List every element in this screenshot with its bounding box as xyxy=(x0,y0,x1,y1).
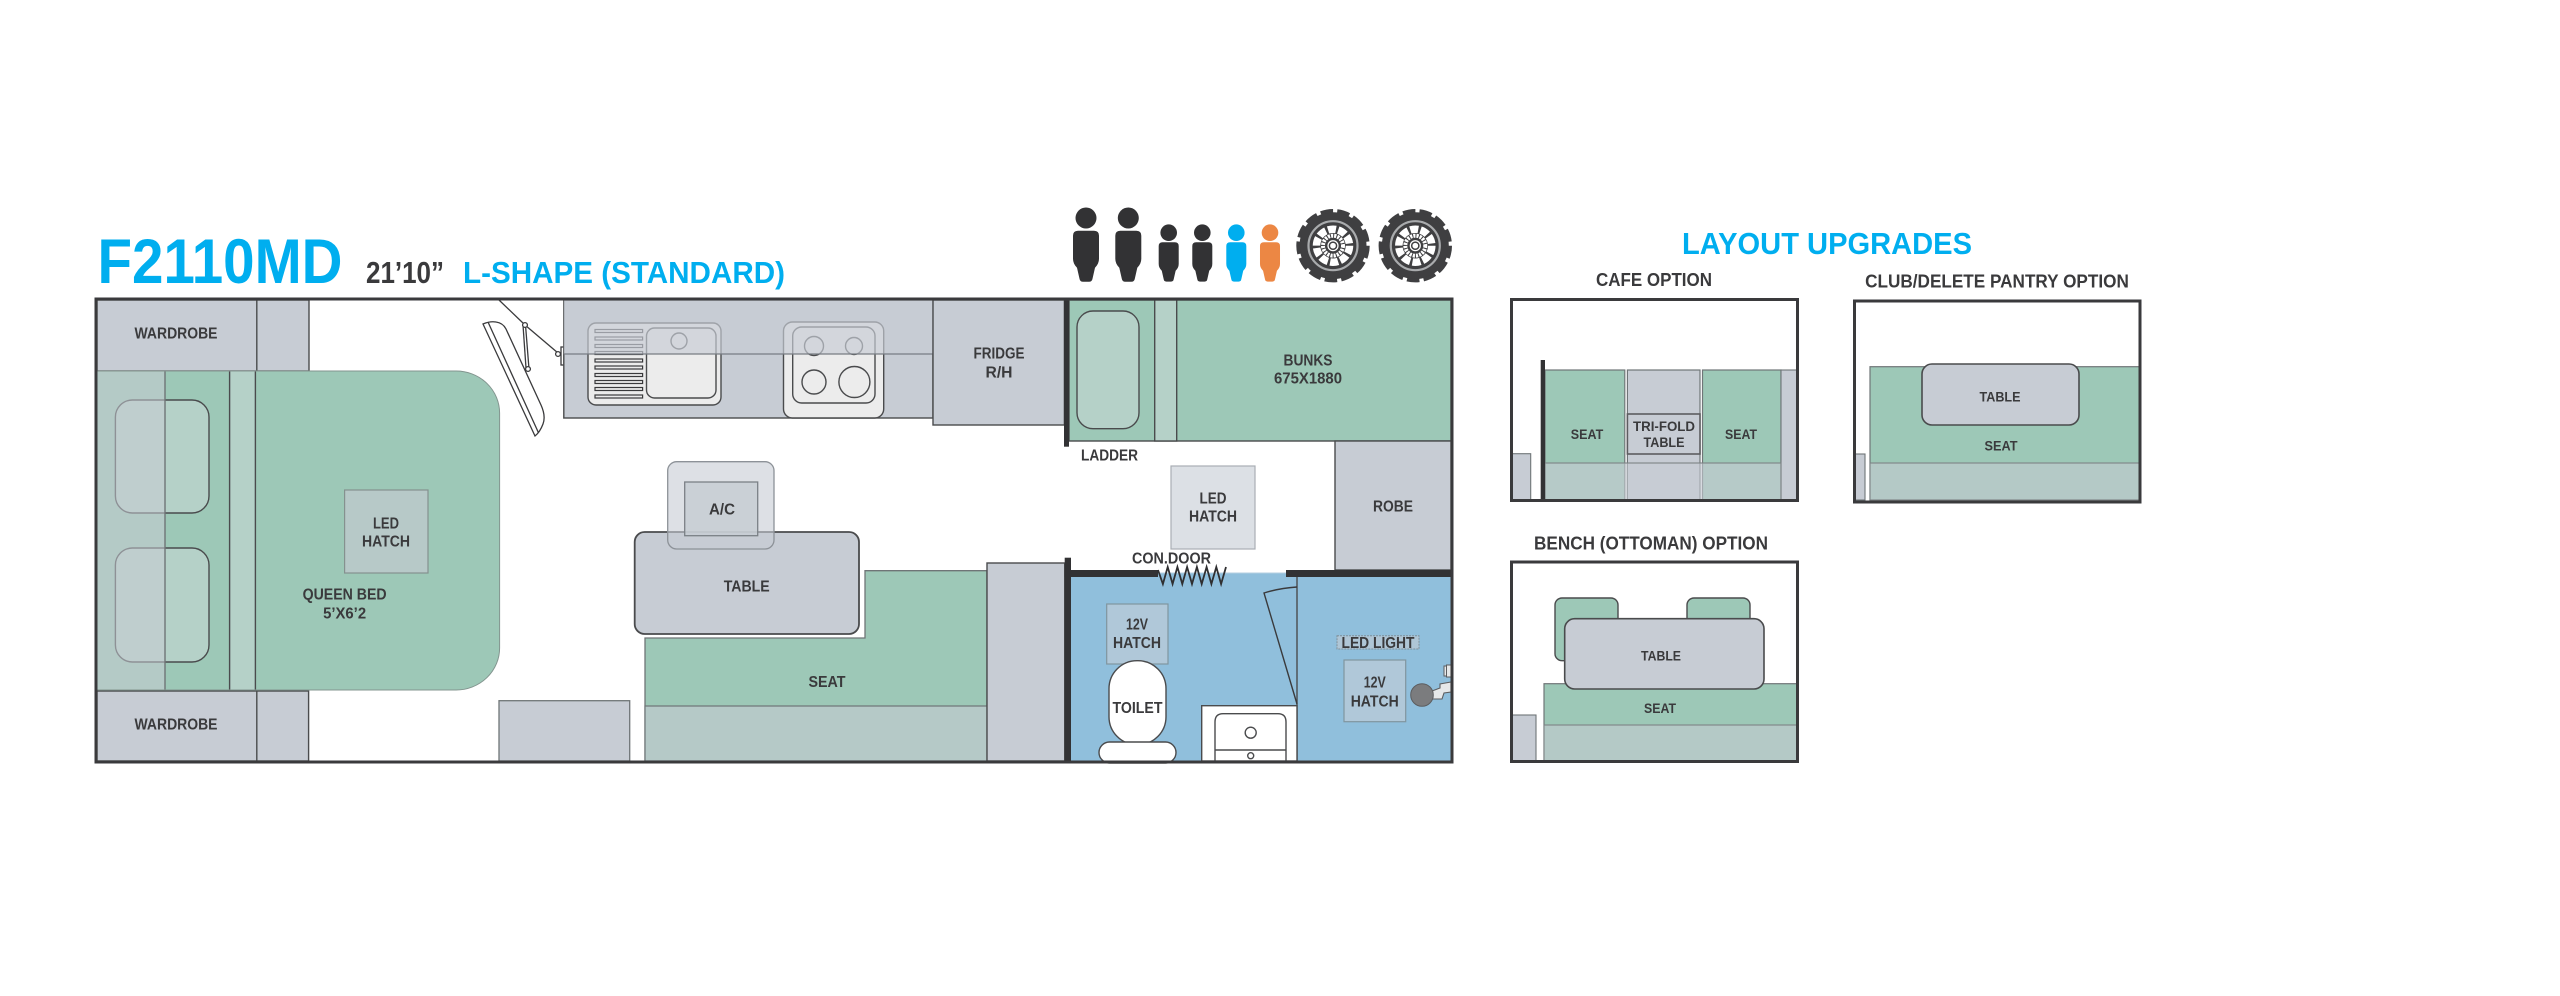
side cabinet xyxy=(1512,715,1536,761)
panel: bathroom xyxy=(1070,573,1451,763)
LED hatch hallway: HATCH xyxy=(1189,508,1237,526)
seat left xyxy=(1545,370,1625,500)
wardrobe bottom: WARDROBE xyxy=(134,716,218,734)
outer wall xyxy=(96,299,1452,762)
ottoman left xyxy=(1555,598,1618,661)
seat xyxy=(1870,367,2140,501)
concertina door xyxy=(1132,550,1226,584)
vanity basin xyxy=(1202,706,1297,761)
LED hatch over bed: HATCH xyxy=(362,534,410,550)
partition walls xyxy=(1064,300,1453,762)
LED hatch over bed xyxy=(345,490,428,573)
sink xyxy=(588,323,721,405)
wardrobe top xyxy=(97,300,309,371)
ottoman right xyxy=(1687,598,1750,648)
table xyxy=(635,532,859,634)
icon: tyre 1 xyxy=(1298,211,1368,280)
toilet: TOILET xyxy=(1112,700,1163,717)
subtitle: layout name: L-SHAPE (STANDARD) xyxy=(463,255,785,290)
icon: adult 1 xyxy=(1073,208,1099,282)
heading: bench option: BENCH (OTTOMAN) OPTION xyxy=(1534,534,1768,554)
box outline xyxy=(1512,562,1798,762)
queen bed xyxy=(97,371,500,690)
seat right xyxy=(1702,370,1781,500)
entry door xyxy=(483,300,564,436)
panel: main floor plan xyxy=(96,299,1453,763)
heading: club option: CLUB/DELETE PANTRY OPTION xyxy=(1865,272,2129,292)
tri-fold table: TRI-FOLD xyxy=(1633,418,1695,434)
12V hatch shower xyxy=(1344,660,1406,722)
ladder label: LADDER xyxy=(1081,448,1138,464)
seat right: SEAT xyxy=(1725,426,1757,442)
fridge: R/H xyxy=(986,364,1012,382)
cabinet beside door xyxy=(499,701,630,761)
bunks: 675X1880 xyxy=(1274,370,1342,388)
LED hatch over bed: LED xyxy=(373,516,399,532)
table: TABLE xyxy=(1980,389,2020,405)
icons: occupancy people xyxy=(1073,208,1280,282)
tri-fold table xyxy=(1627,370,1700,500)
12V hatch shower: HATCH xyxy=(1351,694,1399,710)
bench seat: SEAT xyxy=(1644,700,1676,716)
icon: child orange xyxy=(1260,224,1280,282)
kitchen bench xyxy=(564,300,933,418)
seat left: SEAT xyxy=(1571,426,1604,442)
icon: adult 2 xyxy=(1115,208,1141,282)
icon: child 1 xyxy=(1159,224,1179,282)
LED hatch hallway: LED xyxy=(1200,490,1226,508)
table: TABLE xyxy=(724,578,770,596)
bench seat xyxy=(1544,684,1798,761)
LED hatch hallway xyxy=(1171,466,1255,549)
heading: layout upgrades: LAYOUT UPGRADES xyxy=(1682,226,1972,261)
box outline xyxy=(1854,301,2140,502)
panel: cafe option xyxy=(1511,300,1798,500)
wardrobe top: WARDROBE xyxy=(134,326,218,342)
bunks: BUNKS xyxy=(1284,352,1332,370)
L-shape seat xyxy=(645,571,987,761)
icon: child blue xyxy=(1226,224,1246,282)
tri-fold table: TABLE xyxy=(1644,434,1684,450)
icon: child 2 xyxy=(1192,224,1212,282)
pantry xyxy=(987,563,1065,761)
side cabinet xyxy=(1855,454,1865,500)
length: 21'10": 21’10” xyxy=(366,255,444,290)
queen bed: QUEEN BED xyxy=(303,586,387,604)
toilet xyxy=(1099,661,1176,763)
partition wall xyxy=(1541,360,1545,500)
queen bed: 5’X6’2 xyxy=(323,606,366,622)
seat: SEAT xyxy=(1984,438,2018,454)
A/C unit xyxy=(668,462,774,549)
bathroom swing door xyxy=(1264,587,1297,704)
A/C unit: A/C xyxy=(709,502,735,518)
LED light: LED LIGHT xyxy=(1342,635,1415,652)
L-shape seat: SEAT xyxy=(808,674,846,691)
pantry xyxy=(1781,370,1798,500)
panel: club option xyxy=(1854,301,2140,502)
shower head xyxy=(1411,665,1451,706)
concertina door: CON.DOOR xyxy=(1132,550,1211,568)
table xyxy=(1922,364,2079,425)
fridge: FRIDGE xyxy=(974,346,1024,362)
fridge xyxy=(933,300,1064,425)
panel: bench option xyxy=(1512,562,1798,762)
title: model name: F2110MD xyxy=(98,227,342,297)
12V hatch: HATCH xyxy=(1113,635,1161,652)
cooktop xyxy=(784,322,884,418)
bunks xyxy=(1069,300,1451,441)
lower seat overlay xyxy=(1545,463,1781,500)
table xyxy=(1565,619,1764,689)
robe xyxy=(1335,441,1451,570)
12V hatch shower: 12V xyxy=(1364,674,1386,692)
12V hatch xyxy=(1107,604,1168,664)
12V hatch: 12V xyxy=(1126,616,1149,634)
box outline xyxy=(1512,300,1798,500)
wardrobe bottom xyxy=(97,691,309,761)
robe: ROBE xyxy=(1373,498,1413,516)
table: TABLE xyxy=(1641,648,1681,664)
icon: tyre 2 xyxy=(1380,211,1450,280)
side cabinet xyxy=(1511,454,1531,500)
heading: cafe option: CAFE OPTION xyxy=(1596,270,1712,290)
